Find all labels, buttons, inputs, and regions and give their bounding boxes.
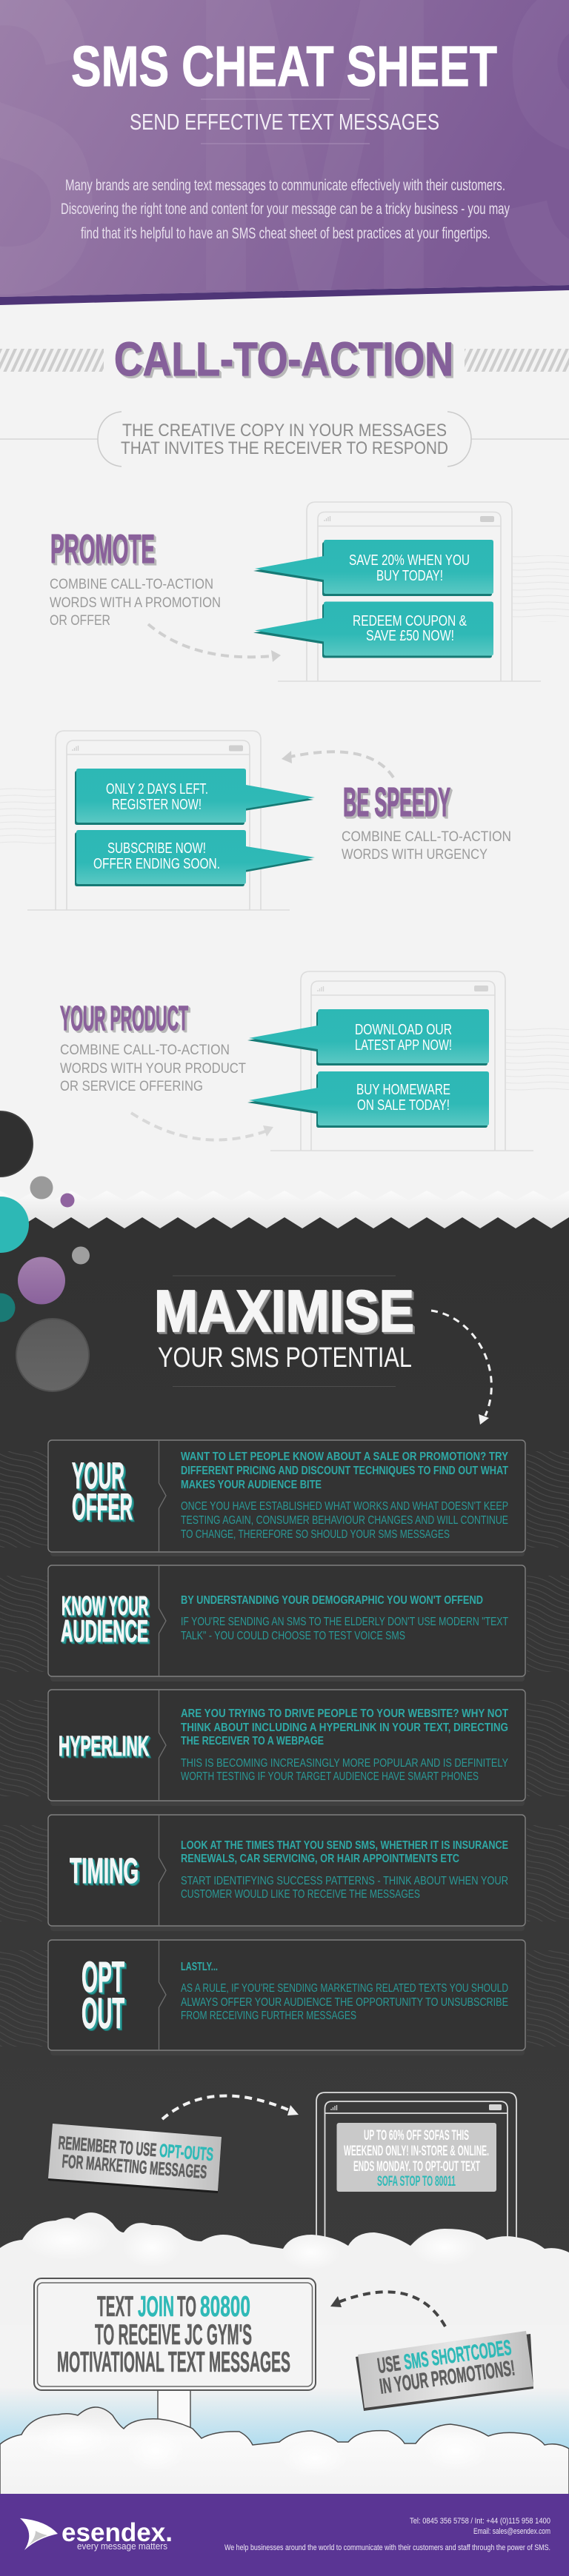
promote description: WORDS WITH A PROMOTION: [50, 595, 221, 611]
heading: maximise: YOUR SMS POTENTIAL: [158, 1342, 412, 1374]
message: sofa offer: [336, 2123, 496, 2192]
timing label: TIMING: [70, 1852, 139, 1891]
panel: opt out: OPT: [81, 1953, 124, 2001]
panel: know your audience: [48, 1565, 525, 1682]
sign: text join: MOTIVATIONAL TEXT MESSAGES: [57, 2346, 290, 2378]
panel: your product: [60, 971, 533, 1151]
sign text: TO: [177, 2291, 196, 2323]
message: sofa offer: SOFA STOP TO 80011: [377, 2174, 456, 2189]
heading: call-to-action: CALL-TO-ACTION: [114, 332, 453, 386]
your offer text: TO CHANGE, THEREFORE SO SHOULD YOUR SMS MESSAGES: [181, 1528, 450, 1541]
message bubble: buy homeware: [247, 1071, 489, 1128]
message bubble: buy homeware: BUY HOMEWARE: [356, 1082, 450, 1098]
message bubble: redeem coupon: SAVE £50 NOW!: [366, 628, 454, 644]
note: remember opt-outs: REMEMBER TO USE: [58, 2132, 157, 2161]
message bubble: only 2 days left: REGISTER NOW!: [112, 797, 202, 813]
message bubble: subscribe now: OFFER ENDING SOON.: [93, 856, 220, 872]
promote description: COMBINE CALL-TO-ACTION: [50, 577, 213, 592]
arrow: promote to phone: [148, 624, 281, 662]
timing text: CUSTOMER WOULD LIKE TO RECEIVE THE MESSAGES: [181, 1888, 420, 1901]
panel: header: [0, 0, 569, 305]
sign text: TEXT: [97, 2291, 133, 2323]
panel: timing: [48, 1815, 525, 1931]
know your audience text: BY UNDERSTANDING YOUR DEMOGRAPHIC YOU WON'T OFFEND: [181, 1594, 483, 1607]
sky glow: [0, 2388, 569, 2455]
panel: footer: [0, 2494, 569, 2576]
hyperlink text: THE RECEIVER TO A WEBPAGE: [181, 1735, 324, 1747]
message bubble: download app: [247, 1009, 489, 1065]
panel: your product: YOUR PRODUCT: [60, 999, 188, 1037]
message bubble: save 20%: SAVE 20% WHEN YOU: [349, 552, 470, 569]
know your audience text: TALK" - YOU COULD CHOOSE TO TEST VOICE SMS: [181, 1630, 405, 1642]
panel: be speedy: [27, 731, 511, 910]
sign text: 80800: [200, 2291, 250, 2323]
phone: promote: [278, 502, 541, 681]
promote heading: PROMOTE: [50, 526, 155, 572]
cloud layer: lower: [0, 2407, 569, 2495]
your product description: OR SERVICE OFFERING: [60, 1079, 203, 1094]
note: use sms shortcodes: USE: [376, 2352, 402, 2378]
your product description: [60, 1043, 246, 1094]
panel: your offer: [48, 1440, 525, 1556]
arrow: tag to sign: [330, 2292, 445, 2326]
intro paragraph: [61, 177, 510, 242]
opt out label: [81, 1953, 124, 2038]
logo: esendex: every message matters: [77, 2540, 167, 2552]
phone: opt-out example: [316, 2092, 516, 2244]
your offer text: MAKES YOUR AUDIENCE BITE: [181, 1479, 322, 1491]
your offer label: YOUR: [72, 1455, 124, 1496]
message bubble: redeem coupon: REDEEM COUPON &: [353, 613, 467, 629]
be speedy description: [342, 829, 511, 863]
dark section background: [0, 1217, 569, 2269]
know your audience label: KNOW YOUR: [61, 1590, 148, 1621]
sign text: JOIN: [138, 2291, 174, 2323]
hyperlink text: THINK ABOUT INCLUDING A HYPERLINK IN YOUR TEXT, DIRECTING: [181, 1722, 508, 1734]
your product description: WORDS WITH YOUR PRODUCT: [60, 1061, 246, 1077]
hyperlink label: HYPERLINK: [59, 1731, 149, 1762]
note: remember opt-outs: [48, 2124, 222, 2193]
message: sofa offer: UP TO 60% OFF SOFAS THIS: [364, 2128, 469, 2144]
know your audience label: AUDIENCE: [61, 1613, 148, 1648]
hyperlink text: [181, 1707, 508, 1783]
timing text: RENEWALS, CAR SERVICING, OR HAIR APPOINTMENTS ETC: [181, 1853, 459, 1865]
sign post: [158, 2388, 190, 2440]
opt out text: LASTLY...: [181, 1961, 218, 1973]
logo: esendex: [20, 2518, 173, 2552]
arrow: note to phone: [162, 2095, 299, 2119]
cloud divider: upper: [0, 2212, 569, 2325]
arrow: maximise to tips: [431, 1311, 491, 1425]
know your audience label: [61, 1590, 148, 1648]
message bubble: download app: DOWNLOAD OUR: [355, 1022, 452, 1038]
logo: esendex: esendex.: [61, 2518, 173, 2547]
message bubble: save 20%: [253, 540, 493, 596]
message bubble: subscribe now: SUBSCRIBE NOW!: [107, 840, 206, 857]
hyperlink text: ARE YOU TRYING TO DRIVE PEOPLE TO YOUR WEBSITE? WHY NOT: [181, 1707, 508, 1720]
sign text: [57, 2291, 290, 2378]
call-to-action definition: THAT INVITES THE RECEIVER TO RESPOND: [121, 438, 448, 458]
contact details: [224, 2517, 550, 2552]
be speedy description: WORDS WITH URGENCY: [342, 847, 488, 863]
panel: hyperlink: [48, 1690, 525, 1806]
message bubble: only 2 days left: ONLY 2 DAYS LEFT.: [106, 781, 208, 797]
phone: your product: [270, 971, 533, 1151]
be speedy description: COMBINE CALL-TO-ACTION: [342, 829, 511, 845]
panel: opt out: [48, 1940, 525, 2055]
your offer text: WANT TO LET PEOPLE KNOW ABOUT A SALE OR PROMOTION? TRY: [181, 1451, 508, 1463]
panel: opt out: OUT: [81, 1990, 124, 2038]
hyperlink text: WORTH TESTING IF YOUR TARGET AUDIENCE HAVE SMART PHONES: [181, 1770, 479, 1783]
call-to-action definition: [0, 412, 569, 466]
your offer text: [181, 1451, 508, 1541]
promote description: [50, 577, 221, 629]
panel: your offer: OFFER: [72, 1486, 133, 1528]
message bubble: buy homeware: ON SALE TODAY!: [357, 1097, 450, 1114]
heading: maximise: [154, 1276, 414, 1386]
opt out text: [181, 1961, 508, 2022]
arrow: be speedy to phone: [282, 751, 393, 777]
decorative circles: [0, 1111, 90, 1391]
message bubble: save 20%: BUY TODAY!: [376, 568, 443, 584]
opt out text: FROM RECEIVING FURTHER MESSAGES: [181, 2010, 356, 2022]
subtitle: SEND EFFECTIVE TEXT MESSAGES: [130, 109, 439, 135]
your offer label: [72, 1455, 133, 1528]
sign text: TO RECEIVE JC GYM'S: [95, 2319, 252, 2351]
message bubble: only 2 days left: [75, 769, 315, 825]
call-to-action definition: THE CREATIVE COPY IN YOUR MESSAGES: [122, 421, 447, 441]
phone: be speedy: [27, 731, 290, 910]
message bubble: subscribe now: [75, 830, 315, 886]
note: remember opt-outs: FOR MARKETING MESSAGES: [61, 2151, 207, 2183]
your product description: COMBINE CALL-TO-ACTION: [60, 1043, 230, 1058]
note: remember opt-outs: OPT-OUTS: [159, 2141, 214, 2165]
timing text: [181, 1839, 508, 1901]
arrow: product to phone: [131, 1113, 273, 1140]
panel: promote: [50, 502, 541, 681]
message bubble: download app: LATEST APP NOW!: [355, 1037, 452, 1054]
zigzag divider: [0, 1191, 569, 1228]
message bubble: redeem coupon: [253, 601, 493, 658]
sign: text join: [34, 2278, 316, 2440]
heading: maximise: MAXIMISE: [154, 1278, 414, 1344]
note: use sms shortcodes: [356, 2331, 533, 2411]
promote description: OR OFFER: [50, 613, 110, 629]
know your audience text: [181, 1594, 508, 1642]
